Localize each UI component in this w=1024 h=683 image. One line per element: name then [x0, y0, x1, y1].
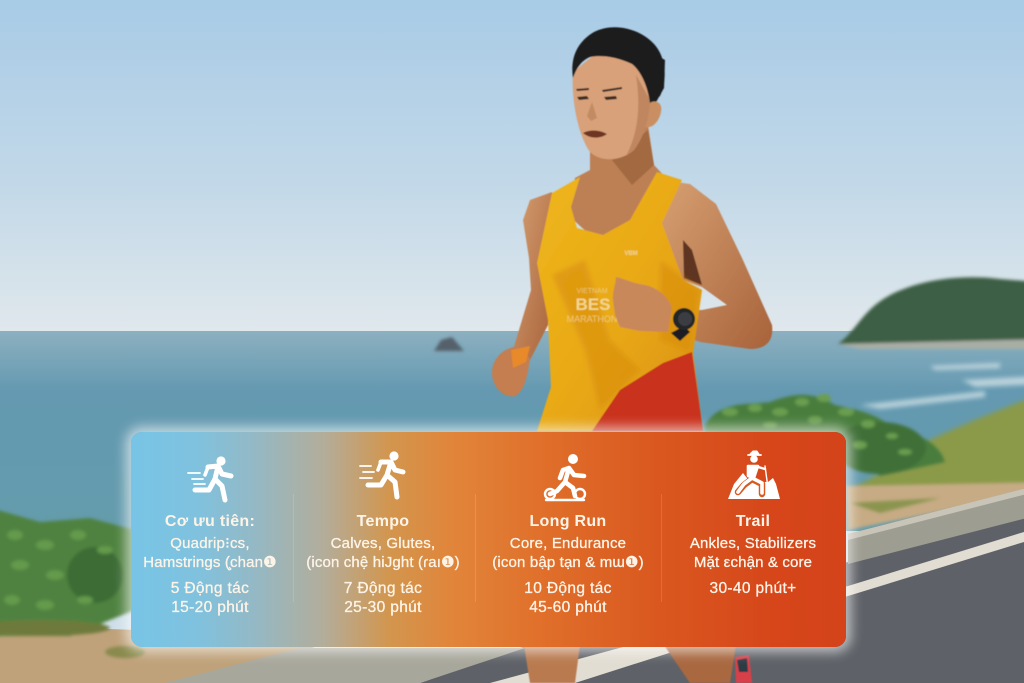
- heading: Tempo: [357, 513, 409, 530]
- jersey: [537, 172, 703, 431]
- jersey logo: VBM: [624, 251, 638, 257]
- column: Tempo: [306, 451, 460, 616]
- exercise count: 10 Động tác: [524, 580, 612, 597]
- watch: [671, 308, 695, 341]
- right bushes: [705, 394, 945, 476]
- muscles line 2: Hamstrings (̧chan❶: [143, 554, 277, 571]
- divider: [293, 494, 294, 602]
- right arm: [662, 180, 772, 349]
- jersey red panel: [592, 352, 703, 431]
- exercise count: 7 Động tác: [344, 580, 422, 597]
- icon: hiker on mountain: [728, 450, 780, 499]
- right kerb: [848, 482, 1024, 564]
- brows: [576, 87, 622, 92]
- mouth: [583, 130, 607, 138]
- jersey logo: [567, 251, 638, 324]
- icon: fast runner: [359, 451, 406, 500]
- ear: [644, 101, 661, 127]
- icon: runner on treadmill: [544, 454, 586, 502]
- island: [838, 277, 1024, 349]
- divider: [475, 494, 476, 602]
- divider: [661, 494, 662, 602]
- duration: 45-60 phút: [529, 599, 607, 616]
- back hair: [630, 40, 665, 104]
- column: Cơ ưu tiên: [143, 456, 277, 616]
- duration: 15-20 phút: [171, 599, 249, 616]
- hair: [572, 27, 665, 103]
- muscles line 1: Quadrip⁝cs,: [170, 535, 250, 552]
- face shade: [626, 75, 650, 156]
- left hand: [492, 347, 530, 396]
- muscles line 1: Ankles, Stabilizers: [690, 535, 816, 552]
- runner: [492, 27, 772, 683]
- muscles line 2: (icon chệ hiJght (ɾaı❶): [306, 554, 460, 571]
- road: [420, 510, 1024, 683]
- muscles line 2: (icon bập tạn & mɯ❶): [492, 554, 644, 571]
- right grass slope: [850, 390, 1024, 490]
- duration: 25-30 phút: [344, 599, 422, 616]
- road white line: [490, 524, 1024, 683]
- left sand: [0, 625, 320, 683]
- neck and chest: [568, 125, 668, 235]
- surf foam: [860, 363, 1024, 409]
- sky: [0, 0, 1024, 333]
- muscles line 2: Mặt εchận & core: [694, 554, 812, 571]
- jersey logo: MARATHON: [567, 314, 617, 324]
- icon: runner with speed lines: [187, 456, 234, 502]
- nose shade: [587, 102, 597, 121]
- bottom kerb: [165, 648, 525, 683]
- eyes: [577, 96, 617, 100]
- duration: 30-40 phút+: [709, 580, 797, 597]
- heading: Long Run: [529, 513, 607, 530]
- jersey logo: BES: [576, 295, 610, 314]
- muscles line 1: Core, Endurance: [510, 535, 626, 552]
- distant rock: [434, 337, 464, 351]
- info panel: [131, 432, 846, 647]
- arm left: [513, 192, 552, 360]
- heading: Cơ ưu tiên:: [165, 513, 255, 530]
- shoe: [735, 655, 752, 683]
- face: [573, 50, 650, 159]
- heading: Trail: [736, 513, 770, 530]
- muscles line 1: Calves, Glutes,: [331, 535, 435, 552]
- column: Long Run: [492, 454, 644, 616]
- right hand: [613, 277, 672, 332]
- legs: [524, 645, 580, 683]
- column: Trail: [690, 450, 816, 597]
- sea: [0, 331, 1024, 531]
- right sand verge: [846, 482, 1024, 530]
- exercise count: 5 Động tác: [171, 580, 249, 597]
- jersey shading: [552, 260, 700, 410]
- jersey logo: VIETNAM: [576, 288, 608, 295]
- left bushes: [0, 505, 145, 658]
